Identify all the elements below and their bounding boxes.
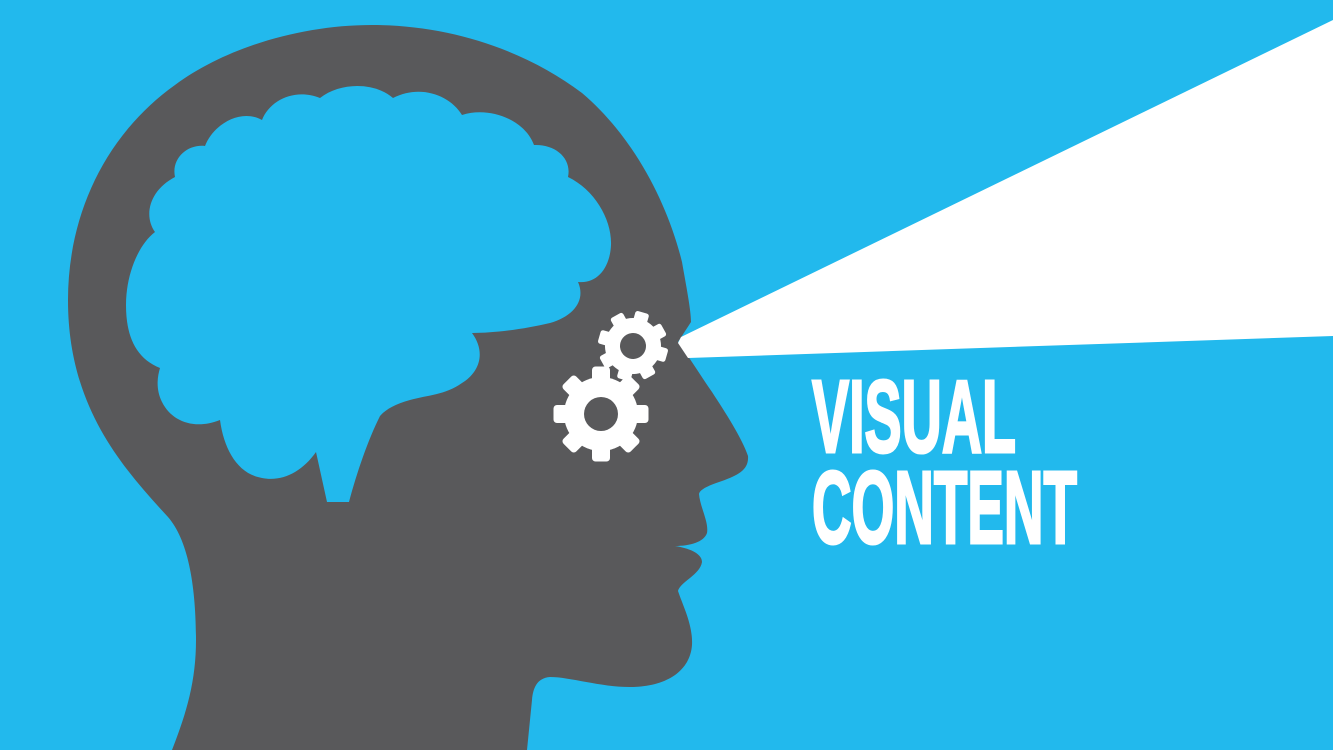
beam of vision <box>678 20 1333 358</box>
heading: visual content <box>812 359 1077 565</box>
large gear icon <box>554 366 648 462</box>
brain <box>126 86 611 502</box>
head silhouette <box>68 25 748 750</box>
heading: visual content: VISUAL <box>812 359 1016 474</box>
heading: visual content: CONTENT <box>812 450 1077 565</box>
small gear icon <box>590 303 676 389</box>
